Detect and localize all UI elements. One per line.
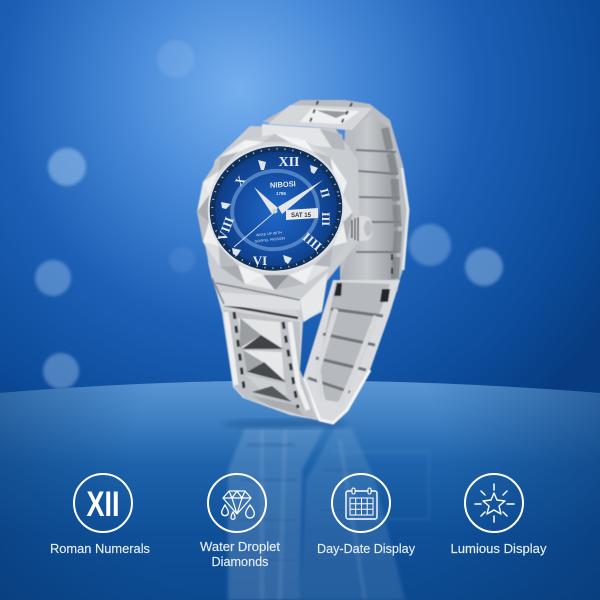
curved reflective table surface <box>0 380 600 600</box>
dial: 1785 <box>276 191 287 196</box>
brand text: NIBOSI <box>270 179 296 190</box>
front bracelet lower <box>208 262 330 420</box>
bokeh light circles <box>35 40 503 389</box>
label: Day-Date Display: Day-Date Display <box>317 541 415 556</box>
diamond markers <box>221 160 318 264</box>
roman numerals: VIII <box>214 215 237 243</box>
icon: XII in circle: XII <box>86 485 120 524</box>
watch shadow on table <box>223 419 347 429</box>
icon: calendar <box>332 474 390 532</box>
roman numerals: III <box>319 212 333 226</box>
watch <box>196 100 408 423</box>
crown <box>351 216 372 241</box>
back bracelet upper <box>262 100 408 300</box>
inner chapter ring <box>225 163 325 257</box>
dial small print: WAKE UP WITH <box>256 231 282 237</box>
roman numerals: II <box>317 187 333 200</box>
watch hands <box>234 180 323 247</box>
back bracelet lower <box>303 280 400 423</box>
label: Water Droplet Diamonds: Water Droplet <box>200 539 280 554</box>
feature: Day-Date Display <box>317 474 415 556</box>
feature: Lumious Display <box>450 474 547 556</box>
icon: glowing star <box>465 474 523 532</box>
roman numerals: VI <box>253 253 267 268</box>
dial <box>196 132 356 285</box>
icon: diamond with water drops <box>208 474 266 532</box>
faceted bezel <box>197 134 353 290</box>
day-date window: SAT 15 <box>291 213 312 219</box>
label line two: Diamonds <box>212 554 269 569</box>
feature: Roman Numerals <box>50 474 150 556</box>
roman numerals: IIII <box>300 229 325 254</box>
lugs and case body <box>200 124 360 322</box>
label: Roman Numerals: Roman Numerals <box>50 541 150 556</box>
roman numerals: X <box>232 173 248 189</box>
day-date window <box>286 208 318 220</box>
roman numerals <box>214 155 333 268</box>
feature: Water Droplet Diamonds <box>200 474 280 569</box>
watch reflection on table <box>228 426 429 600</box>
roman numerals: XII <box>278 155 300 170</box>
label: Lumious Display: Lumious Display <box>450 541 547 556</box>
dial: GOSPEL PASSION <box>254 236 286 244</box>
